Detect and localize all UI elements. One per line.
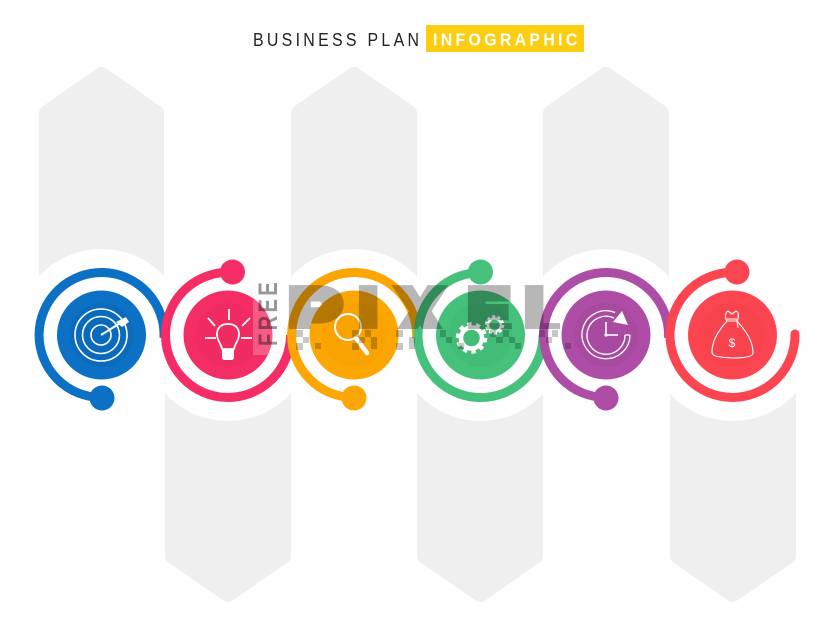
step 2: idea, pink xyxy=(166,260,290,397)
white halos behind the rings xyxy=(16,249,818,421)
icon: magnifying glass xyxy=(335,314,367,353)
step 3: search, orange xyxy=(292,272,417,410)
downward arrow panels xyxy=(173,335,788,594)
title: BUSINESS PLAN xyxy=(253,29,419,50)
icon: gears xyxy=(458,316,503,352)
watermark label: FREE xyxy=(253,282,284,346)
title xyxy=(253,25,584,52)
step 4: settings, green xyxy=(418,260,543,398)
watermark pixels xyxy=(296,330,571,350)
watermark word: E xyxy=(468,275,510,349)
watermark word: L xyxy=(525,275,565,349)
icon: money bag: $ xyxy=(729,336,736,350)
step 1: target, blue xyxy=(39,273,164,410)
icon: light bulb xyxy=(205,309,252,360)
title: INFOGRAPHIC xyxy=(433,30,577,50)
watermark word: P xyxy=(289,275,341,349)
watermark xyxy=(258,283,571,350)
step 5: time, purple xyxy=(544,272,669,410)
upward arrow panels xyxy=(47,75,661,340)
icon: target xyxy=(75,309,129,361)
step 6: money, red xyxy=(670,260,795,397)
watermark backing patch xyxy=(253,300,273,355)
watermark word: I xyxy=(359,275,377,349)
watermark word xyxy=(288,285,560,329)
watermark word: X xyxy=(398,275,442,349)
icon: clock with arrow xyxy=(582,311,630,359)
